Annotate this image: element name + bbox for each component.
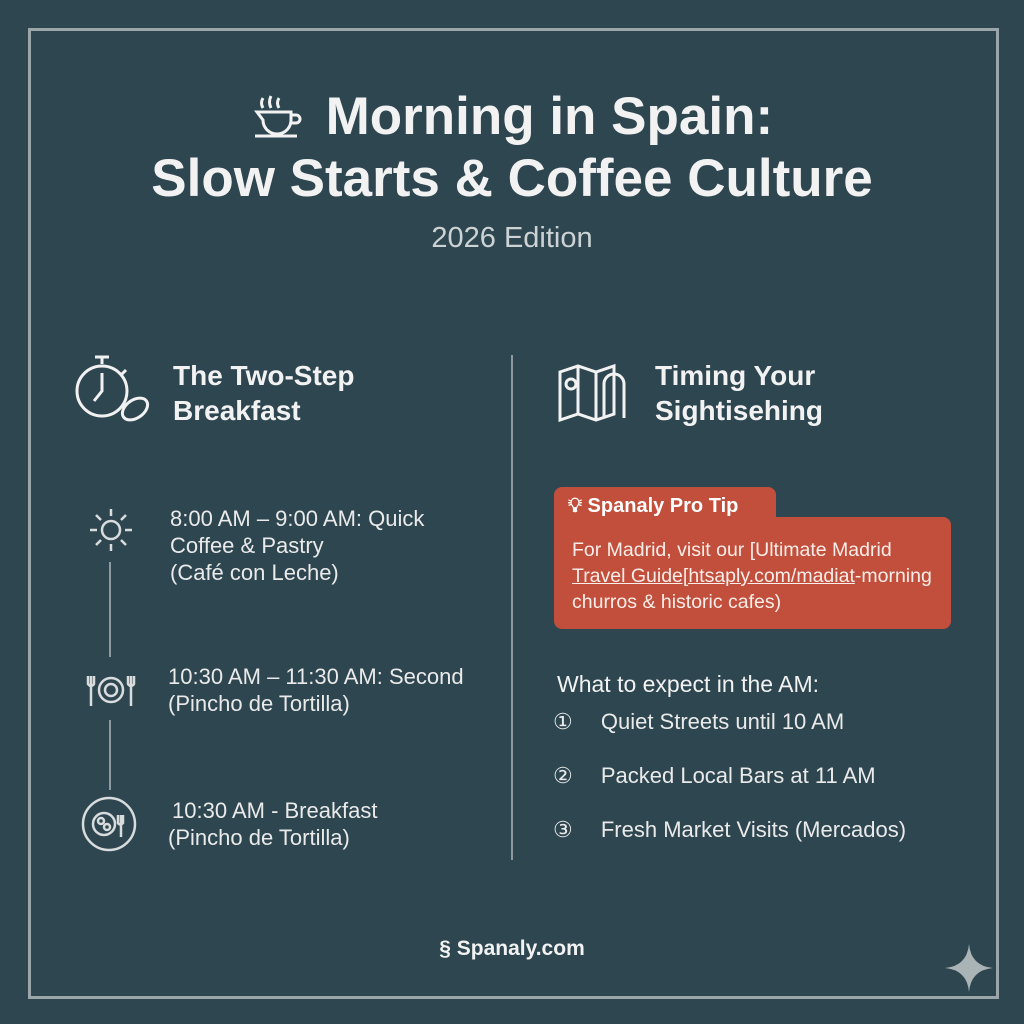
step 2: 10:30 AM – 11:30 AM: Second [168, 664, 464, 689]
step 1: (Café con Leche) [170, 560, 339, 585]
heading: two-step breakfast: The Two-Step [173, 360, 354, 391]
tip text: churros & historic cafes) [572, 591, 781, 613]
subtitle: 2026 Edition [431, 222, 593, 254]
heading: timing [655, 360, 823, 426]
heading: timing: Timing Your [655, 360, 815, 391]
divider [511, 355, 513, 860]
list: ③ Fresh Market Visits (Mercados) [553, 817, 906, 842]
tip text [572, 539, 932, 613]
step 2 [168, 664, 464, 716]
list: ① Quiet Streets until 10 AM [553, 709, 844, 734]
icon: coffee cup [254, 95, 302, 138]
icon: stopwatch croissant [76, 356, 150, 422]
timeline [82, 506, 464, 852]
heading: two-step breakfast [173, 360, 354, 426]
step 3: (Pincho de Tortilla) [168, 825, 350, 850]
title: Morning in Spain: [326, 87, 773, 146]
list [553, 709, 906, 842]
icon: map [558, 364, 626, 422]
footer logo: § Spanaly.com [439, 937, 585, 960]
step 1: 8:00 AM – 9:00 AM: Quick [170, 506, 424, 531]
icon: plate [86, 676, 136, 706]
step 1: Coffee & Pastry [170, 533, 324, 558]
step 3: 10:30 AM - Breakfast [172, 798, 377, 823]
title: Slow Starts & Coffee Culture [151, 149, 873, 208]
tip text: Travel Guide[htsaply.com/madiat-morning [572, 565, 932, 587]
heading: two-step breakfast: Breakfast [173, 395, 301, 426]
icon: plate circle [82, 796, 136, 852]
step 1 [170, 506, 424, 585]
heading: timing: Sightisehing [655, 395, 823, 426]
tip heading: 💡︎ Spanaly Pro Tip [568, 495, 738, 517]
icon: sun [90, 509, 132, 551]
callout: pro tip [554, 487, 951, 629]
heading: what to expect: What to expect in the AM: [557, 671, 819, 697]
step 3 [168, 798, 378, 850]
title [151, 87, 873, 208]
step 2: (Pincho de Tortilla) [168, 691, 350, 716]
icon: sparkle [945, 944, 993, 992]
list: ② Packed Local Bars at 11 AM [553, 763, 876, 788]
tip text: For Madrid, visit our [Ultimate Madrid [572, 539, 892, 561]
